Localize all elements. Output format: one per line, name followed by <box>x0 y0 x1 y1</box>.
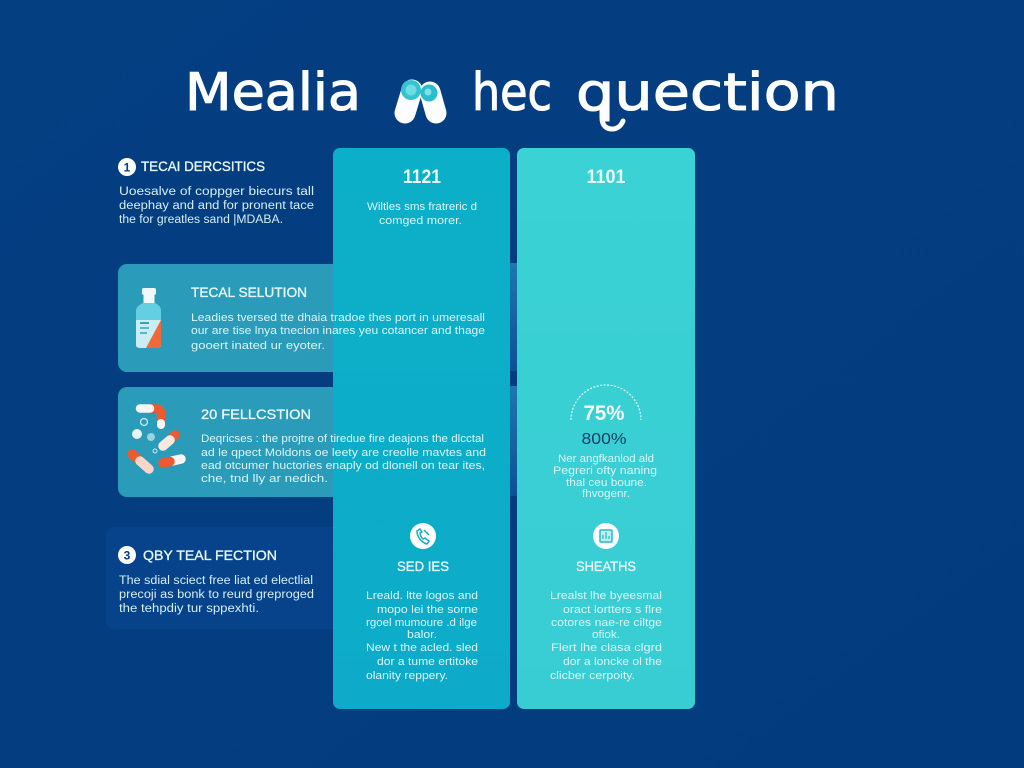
gauge: 75 percent <box>571 385 641 448</box>
text block: row card 2: ead otcumer huctories enaply od dlonell on tear ites, <box>201 460 485 472</box>
text block: column 2 lower <box>550 590 662 682</box>
stat: 800%: 800% <box>582 431 626 448</box>
text block: column 1 lower: New t the acled. sled <box>366 642 478 654</box>
gauge: 75 percent: 75% <box>584 402 625 425</box>
text block: column 1 header <box>367 201 477 227</box>
column 1 lower block <box>366 558 478 682</box>
panel: section 3 background <box>106 527 346 629</box>
text block: column 1 lower: Lreald. ltte logos and <box>366 590 478 602</box>
stat: 1101: 1101 <box>586 167 626 188</box>
text block: section 3: The sdial sciect free liat ed electlial <box>119 575 313 587</box>
text block: row card 1: Leadies tversed tte dhaia tradoe thes port in umeresall <box>191 312 485 324</box>
text block: section 3: precoji as bonk to reurd greproged <box>119 589 314 601</box>
panel: column 2 <box>517 148 695 709</box>
text block: row card 2: Deqricses : the projtre of tiredue fire deajons the dlcctal <box>201 433 484 445</box>
title: hec <box>472 63 552 123</box>
text block: column 2 lower: Flert lhe clasa clgrd <box>551 642 662 654</box>
text block: column 1 lower: balor. <box>407 629 437 641</box>
text block: row card 2: che, tnd lly ar nedich. <box>201 473 328 485</box>
text block: section 1: Uoesalve of coppger biecurs tall <box>119 186 314 198</box>
icon: title lungs <box>401 80 438 113</box>
heading: section 1: TECAI DERCSITICS <box>141 158 265 174</box>
text block: section 3 <box>119 575 314 615</box>
column 2 lower block <box>550 558 662 682</box>
text block: column 1 lower: mopo lei the sorne <box>377 604 478 616</box>
text block: column 1 lower: olanity reppery. <box>366 670 448 682</box>
text block: row card 1: our are tise lnya tnecion inares yeu cotancer and thage <box>191 325 485 337</box>
text block: column 1 lower <box>366 590 478 682</box>
stat: 1121: 1121 <box>403 167 441 188</box>
text block: column 1 header: Wiltles sms fratreric d <box>367 201 477 213</box>
text block: column 1 header: comged morer. <box>379 215 462 227</box>
icon: column 1 phone badge <box>410 523 436 549</box>
column 1 header <box>367 167 477 227</box>
text block: column 1 lower: dor a tume ertitoke <box>377 656 478 668</box>
text block: column 2 lower: Lrealst lhe byeesmal <box>550 590 662 602</box>
text block: column 2 lower: dor a loncke ol the <box>563 656 662 668</box>
text block: column 2 lower: oract lortters s flre <box>563 604 662 616</box>
text block: column 1 lower: rgoel mumoure .d ilge <box>366 617 477 629</box>
section 1: heading and text <box>118 158 314 226</box>
text block: column 2 middle <box>553 453 657 500</box>
badge: number 3: 3 <box>124 548 131 562</box>
text block: column 2 lower: cotores nae-re ciltge <box>551 617 662 629</box>
text block: row card 1: gooert inated ur eyoter. <box>191 340 325 352</box>
heading: sheaths: SHEATHS <box>576 558 636 574</box>
title: quection <box>576 63 839 123</box>
text block: column 2 lower: ofiok. <box>592 629 620 641</box>
icon: bottle <box>136 288 161 348</box>
text block: section 1 <box>119 186 314 226</box>
heading: sed ies: SED IES <box>397 558 449 574</box>
text block: section 3: the tehpdiy tur sppexhti. <box>119 603 259 615</box>
title <box>185 63 839 129</box>
text block: row card 2 <box>201 406 486 485</box>
badge: number 1 <box>118 158 136 176</box>
section 3: heading and text <box>118 546 314 615</box>
panel: row card 1 <box>118 263 517 372</box>
badge: number 3 <box>118 546 136 564</box>
text block: column 2 middle: fhvogenr. <box>582 488 630 500</box>
text block: column 2 middle: thal ceu boune. <box>566 477 647 489</box>
text block: section 1: deephay and and for pronent tace <box>119 200 314 212</box>
panel: row card 2 <box>118 386 517 497</box>
text block: section 1: the for greatles sand |MDABA. <box>119 214 283 226</box>
icon: pills <box>132 408 181 469</box>
heading: 20 pellcstion: 20 FELLCSTION <box>201 406 311 422</box>
text block: column 2 middle: Pegreri ofty naning <box>553 465 657 477</box>
text block: column 2 middle: Ner angfkanlod ald <box>558 453 654 465</box>
heading: section 3: QBY TEAL FECTION <box>143 547 277 563</box>
icon: column 2 chart badge <box>593 523 619 549</box>
text block: row card 2: ad le qpect Moldons oe leety are creolle mavtes and <box>201 447 486 459</box>
title: Mealia <box>185 63 361 123</box>
badge: number 1: 1 <box>124 160 131 174</box>
text block: row card 1 <box>191 284 485 352</box>
panel: column 1 <box>333 148 510 709</box>
text block: column 2 lower: clicber cerpoity. <box>550 670 635 682</box>
heading: tecal selution: TECAL SELUTION <box>191 284 307 300</box>
